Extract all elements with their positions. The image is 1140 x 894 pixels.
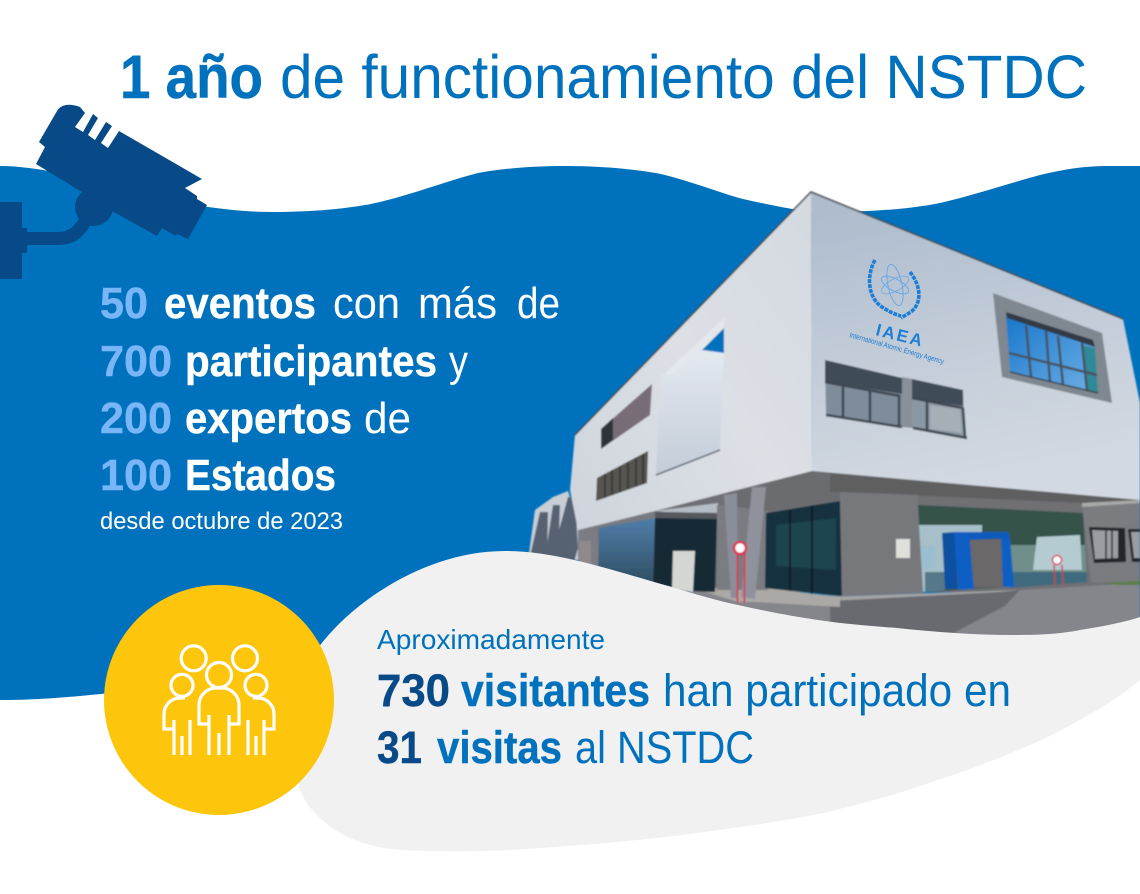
gap pillar — [902, 377, 913, 428]
blue portal — [942, 532, 1014, 590]
logo: atom and wreath — [870, 260, 919, 318]
line: 730 visitantes: han participado en — [663, 665, 1011, 716]
line: 700 participantes: y — [449, 338, 468, 386]
line: 200 expertos: 200 — [100, 395, 172, 443]
line: 50 eventos: de — [517, 280, 560, 328]
icon: security camera — [0, 105, 207, 279]
text: approximately: Aproximadamente — [377, 624, 605, 655]
line: 730 visitantes: visitantes — [461, 665, 650, 716]
central glass — [765, 501, 842, 596]
soffit left — [725, 471, 840, 511]
line: 31 visitas: 31 — [377, 722, 422, 773]
wall behind columns — [717, 505, 768, 590]
sign right — [1052, 556, 1063, 585]
title: de functionamiento del NSTDC — [280, 43, 1087, 112]
line: 50 eventos: eventos — [164, 280, 316, 328]
line: 50 eventos — [100, 280, 560, 328]
line: 100 Estados: 100 — [100, 452, 172, 500]
line: 200 expertos: de — [364, 395, 411, 443]
photo: NSTDC building — [528, 192, 1140, 650]
text: date note: desde octubre de 2023 — [100, 508, 343, 535]
umbrellas — [530, 497, 578, 566]
title: 1 año — [120, 43, 263, 112]
line: 50 eventos: más — [418, 280, 497, 328]
line: 200 expertos: expertos — [185, 395, 352, 443]
panel: blue wave background — [0, 166, 1140, 700]
line: 200 expertos — [100, 395, 411, 443]
strip window lower — [596, 451, 648, 501]
right face — [811, 192, 1140, 500]
right block — [1082, 500, 1140, 585]
text block: statistics — [100, 280, 560, 500]
left glass — [598, 518, 655, 590]
gravel — [693, 588, 840, 607]
line: 31 visitas: visitas — [437, 722, 562, 773]
ground floor backing — [578, 470, 1140, 592]
roof edge — [575, 192, 1123, 435]
plaque — [896, 539, 910, 558]
cabinet — [672, 551, 695, 592]
pavement — [690, 583, 1140, 650]
text block: visitors — [377, 624, 1011, 773]
logo text: agency name: International Atomic Energy Agency — [848, 330, 945, 366]
right window — [912, 379, 967, 438]
line: 100 Estados — [100, 452, 336, 500]
strip window upper — [601, 384, 652, 449]
soffit right — [830, 473, 1140, 503]
panel: grey wave — [299, 551, 1140, 851]
ground floor left wall — [578, 526, 599, 575]
right glass — [918, 505, 1087, 592]
line: 50 eventos: 50 — [100, 280, 148, 328]
line: 700 participantes: participantes — [185, 338, 437, 386]
line: 50 eventos: con — [333, 280, 400, 328]
big window — [993, 293, 1112, 403]
background tent — [528, 491, 580, 560]
line: 100 Estados: Estados — [185, 452, 336, 500]
line: 730 visitantes — [377, 665, 1011, 716]
line: 730 visitantes: 730 — [377, 665, 450, 716]
icon: yellow circle with visitors — [104, 585, 334, 815]
logo text: IAEA: IAEA — [874, 320, 924, 350]
line: 31 visitas: al NSTDC — [575, 722, 754, 773]
traffic sign left — [734, 542, 746, 603]
line: 31 visitas — [377, 722, 754, 773]
grey block — [840, 492, 923, 596]
left face — [570, 192, 812, 530]
line: 700 participantes: 700 — [100, 338, 172, 386]
opening in left face — [656, 318, 724, 475]
middle window — [825, 360, 902, 427]
columns — [724, 487, 766, 599]
